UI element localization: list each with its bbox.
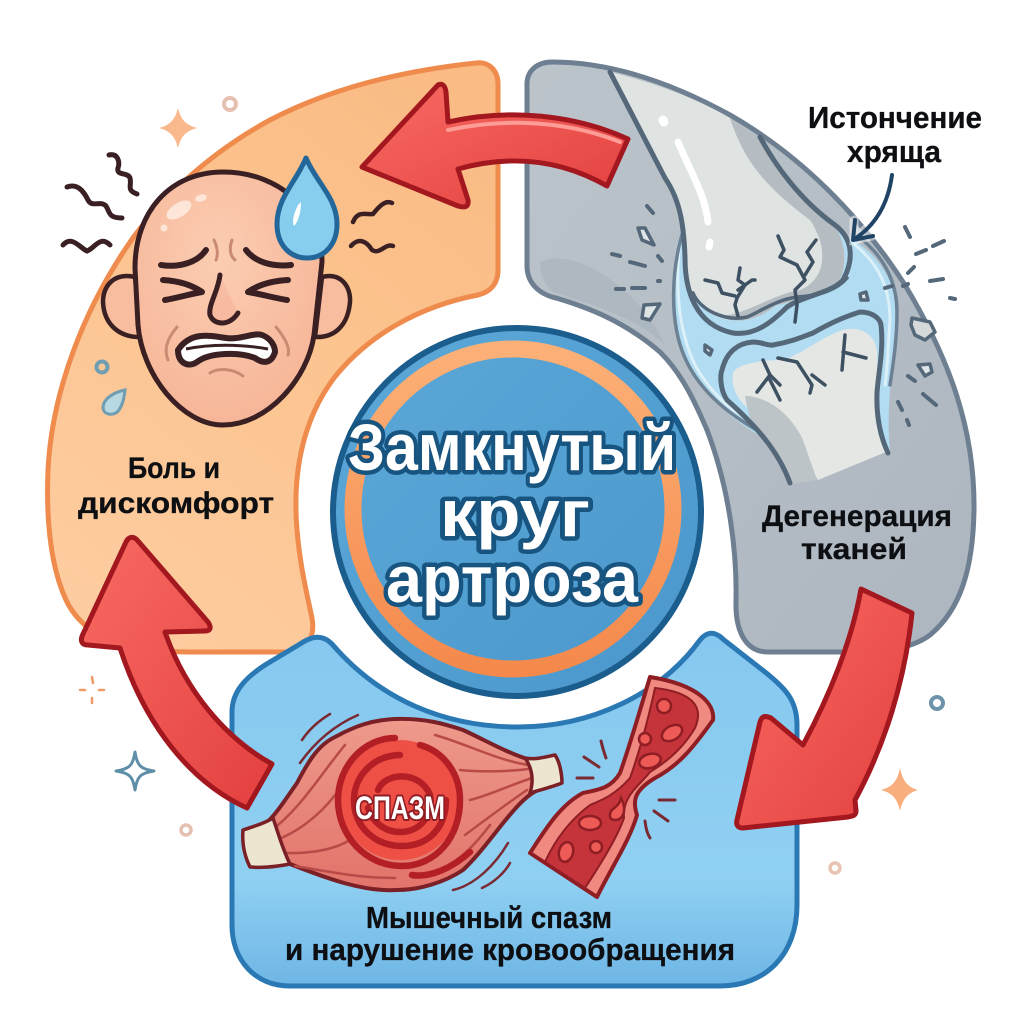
bone highlights <box>663 120 710 247</box>
nose <box>210 275 238 323</box>
orange dots lower left <box>80 677 104 703</box>
icon: sweat drop <box>277 158 337 258</box>
blood cells <box>557 699 685 863</box>
center title: круг <box>440 476 590 550</box>
callout arrow: cartilage thinning <box>853 175 892 240</box>
center title: артроза <box>386 542 639 616</box>
squiggles left of head <box>63 155 137 251</box>
shading on gray panel <box>540 258 665 345</box>
center title: Замкнутый <box>348 410 676 484</box>
small drop on orange panel <box>103 390 125 414</box>
muscle fibres <box>268 735 535 878</box>
left ear <box>103 276 142 337</box>
label: cartilage thinning: Истончение <box>808 100 982 135</box>
label: muscle spasm: и нарушение кровообращения <box>285 932 735 967</box>
cracks <box>705 236 866 400</box>
central circle <box>333 328 701 696</box>
center title <box>348 410 676 616</box>
panel: tissue degeneration <box>527 62 974 652</box>
eyebrows <box>161 250 291 266</box>
sparkle: orange right <box>881 768 918 811</box>
sparkle: orange upper left <box>159 108 197 148</box>
capsule slate outline <box>674 228 897 432</box>
decorations around circle <box>63 98 943 873</box>
lower bone shadow <box>745 396 817 484</box>
upper bone shadow <box>718 118 844 321</box>
head highlights <box>160 193 208 232</box>
illustration: narrowed blood vessel <box>530 677 713 897</box>
spasm label: СПАЗМ <box>355 790 445 826</box>
orange ring <box>353 349 673 669</box>
muscle belly <box>265 719 538 890</box>
spiral spasm mark <box>338 738 470 876</box>
upper bone outline <box>610 72 850 333</box>
upper bone <box>610 72 844 321</box>
teeth line <box>186 345 268 349</box>
label: pain: дискомфорт <box>78 487 274 520</box>
lower bone fill <box>733 329 886 480</box>
ring lower left <box>181 825 191 835</box>
label: cartilage thinning <box>808 100 982 169</box>
mouth <box>178 334 275 365</box>
ring upper <box>224 98 236 110</box>
capsule outer lines <box>678 240 890 420</box>
right ear <box>315 276 350 337</box>
lower bone outline <box>721 312 888 483</box>
head <box>135 172 322 425</box>
ring on orange panel <box>96 362 108 372</box>
label: pain: Боль и <box>128 452 220 485</box>
ring lower right <box>830 863 840 873</box>
arrow: left, spasm to pain <box>81 537 272 808</box>
icon: face in pain <box>103 172 350 425</box>
ring right <box>931 697 943 709</box>
tendon left <box>243 818 290 867</box>
label: cartilage thinning: хряща <box>847 134 942 169</box>
label: muscle spasm <box>285 900 735 967</box>
cartilage line <box>693 278 847 318</box>
arrow highlight <box>448 123 620 142</box>
label: pain <box>78 452 274 520</box>
label: degeneration <box>762 500 952 566</box>
arrow: top, joint to pain <box>362 84 628 207</box>
illustration: arthritic joint <box>610 72 955 484</box>
joint fragments and dashes <box>638 228 935 376</box>
label: degeneration: тканей <box>801 533 907 566</box>
synovial capsule <box>673 205 897 480</box>
sparkle: blue outline <box>116 752 154 790</box>
eyes <box>163 280 288 300</box>
arrow: right, degeneration to spasm <box>737 589 912 828</box>
motion lines <box>300 714 510 890</box>
forehead wrinkles <box>166 240 289 376</box>
label: muscle spasm: Мышечный спазм <box>366 900 612 935</box>
tendon right <box>525 755 562 793</box>
illustration: muscle <box>243 714 562 890</box>
constriction marks <box>577 741 675 838</box>
panel: muscle spasm and circulation <box>232 633 797 986</box>
label: degeneration: Дегенерация <box>762 500 952 533</box>
icon: pain squiggles right <box>351 202 393 251</box>
panel: pain and discomfort <box>48 63 498 652</box>
